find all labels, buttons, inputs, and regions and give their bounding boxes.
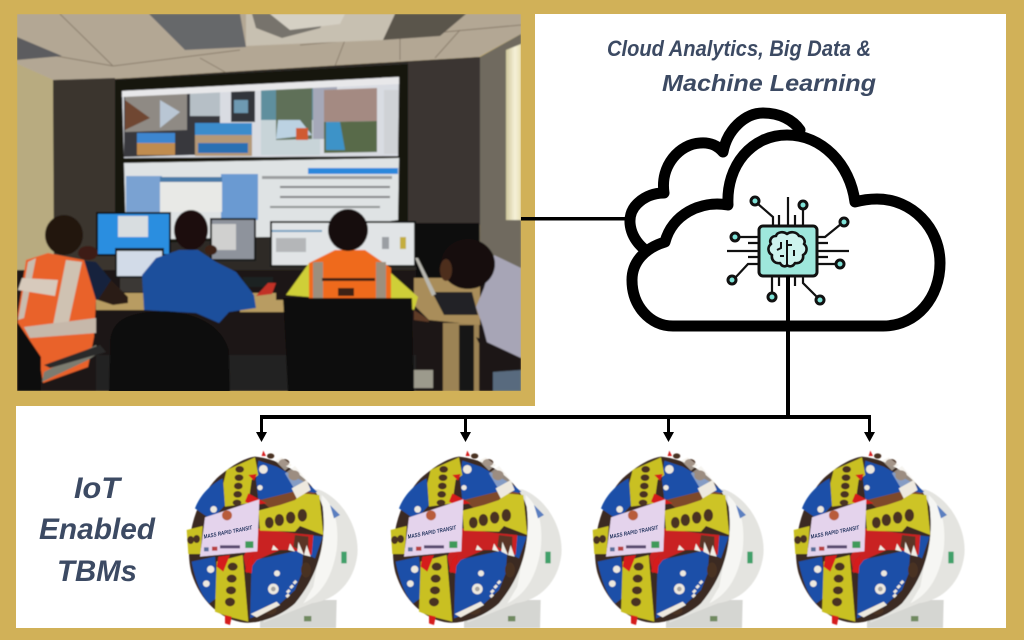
- desk legs: [443, 323, 479, 391]
- red lanyard and mouse: [256, 283, 276, 296]
- lower room, dark: [17, 270, 521, 391]
- monitors: right pair: [270, 221, 416, 267]
- heading: cloud analytics: Machine Learning: [662, 70, 876, 96]
- man 1 with orange vest: [18, 215, 128, 383]
- heading: IoT Enabled TBMs: TBMs: [57, 555, 137, 588]
- TBM 3: MASS RAPID TRANSIT: [609, 525, 659, 541]
- arrow 1: [256, 417, 267, 442]
- TBM 2: [391, 451, 562, 628]
- laptop: [114, 247, 165, 271]
- TBM 1: [187, 451, 358, 628]
- heading: cloud analytics: [607, 36, 876, 96]
- connector: photo to cloud: [521, 217, 630, 220]
- chair left: [18, 323, 41, 391]
- TBM 2: MASS RAPID TRANSIT: [407, 525, 457, 541]
- heading: cloud analytics: Cloud Analytics, Big Data &: [607, 36, 871, 61]
- arrow 3: [663, 417, 674, 442]
- top video wall screen: [122, 77, 399, 158]
- TBM 4: MASS RAPID TRANSIT: [810, 525, 860, 541]
- floor: [96, 355, 416, 391]
- man 4 leaning: [440, 239, 521, 391]
- panel: TBM row background: [16, 406, 1006, 628]
- photo: control room with operators: [17, 14, 521, 392]
- man 2 in blue shirt: [142, 210, 256, 323]
- heading: IoT Enabled TBMs: IoT: [74, 472, 123, 505]
- TBM 4: [794, 451, 965, 628]
- panel: cloud analytics background: [535, 14, 1006, 406]
- brain: [768, 232, 807, 266]
- chip trace nodes: [728, 197, 848, 304]
- left wall: [17, 64, 60, 275]
- desk: [96, 293, 276, 310]
- arrow 4: [864, 417, 875, 442]
- chip traces: [727, 197, 849, 298]
- chair behind man 2: [109, 311, 230, 392]
- heading: IoT Enabled TBMs: Enabled: [39, 513, 156, 546]
- heading: IoT Enabled TBMs: [39, 472, 156, 588]
- ceiling: [17, 14, 521, 80]
- right wall and curtain: [480, 34, 521, 275]
- chair behind man 3: [283, 298, 414, 392]
- monitor: blue screen: [96, 212, 171, 256]
- ceiling vents: [149, 14, 246, 50]
- TBM 3: [593, 451, 764, 628]
- dark wall: [53, 57, 480, 270]
- video wall frame: [115, 64, 408, 245]
- air conditioner: [246, 14, 395, 46]
- monitor: grey: [210, 218, 256, 261]
- man 3 in yellow and orange vest: [286, 209, 429, 322]
- keyboard: [432, 292, 478, 315]
- chip body: [759, 226, 817, 276]
- back cloud: [630, 113, 800, 249]
- front cloud: [632, 135, 940, 326]
- TBM 1: MASS RAPID TRANSIT: [203, 525, 253, 541]
- connector: cloud to TBMs: [256, 276, 875, 442]
- arrow 2: [460, 417, 471, 442]
- lower video wall screen: [124, 158, 399, 240]
- icon: cloud with AI chip: [630, 113, 940, 326]
